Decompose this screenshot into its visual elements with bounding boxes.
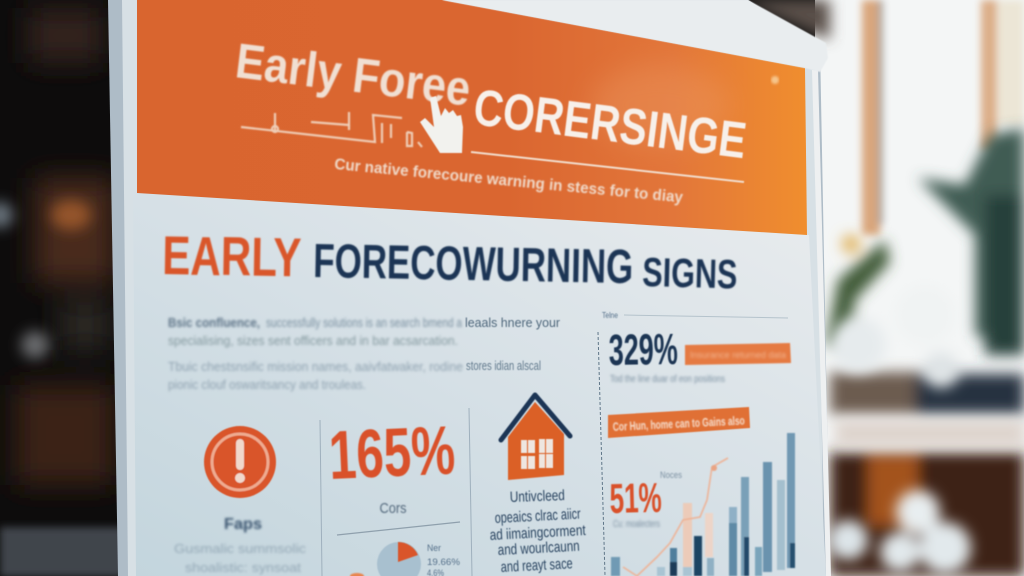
poster board frame <box>108 0 831 576</box>
intro text block: successfully solutions is an search bmend a <box>266 315 463 330</box>
stat: 329%: 329% <box>608 325 678 375</box>
329% caption: Tod the line duar of eon positions <box>610 374 725 385</box>
intro text block: Tbuic chestsnsific mission names, aaivfatwaker, rodine <box>168 359 463 374</box>
top rail of board <box>442 0 828 84</box>
house description: opeaics clrac aiicr <box>494 506 581 527</box>
intro text block <box>168 315 561 392</box>
banner line icons <box>241 112 422 147</box>
right column top label and rule: Telne <box>602 311 618 320</box>
background: bright window and plants on right <box>815 0 1024 576</box>
intro text block: pionic clouf oswaritsancy and trouleas. <box>168 377 366 392</box>
icon: warning circle <box>204 426 276 498</box>
house description: and reayt sace <box>500 555 573 576</box>
pie chart with legend: 19.66% <box>427 557 460 567</box>
stat: 165%: 165% <box>327 412 457 494</box>
banner glow <box>590 65 730 145</box>
intro text block: stores idian alscal <box>466 358 541 373</box>
intro text block: specialising, sizes sent officers and in bar acsarcation. <box>168 333 458 348</box>
banner subtitle: Cur native forecoure warning in stess for to diay <box>334 156 684 207</box>
warning label and description: shoalistic: synsoat <box>185 560 301 575</box>
main heading: orange word: EARLY <box>162 224 302 288</box>
orange tag middle: Cor Hun, home can to Gains also <box>612 414 745 434</box>
dark area behind top of board <box>740 0 830 40</box>
intro text block: Bsic confluence, <box>168 315 260 330</box>
icon: house <box>501 395 570 480</box>
banner rule <box>471 152 744 182</box>
pie chart with legend <box>350 542 460 576</box>
right column top label and rule <box>602 311 788 320</box>
banner title, second part: CORERSINGE <box>471 78 750 169</box>
house description: ad iimaingcorment <box>489 522 587 544</box>
background: blurred dark interior on left <box>0 0 125 576</box>
house description <box>489 487 587 576</box>
main heading: navy words: SIGNS <box>642 249 738 297</box>
orange header banner <box>137 0 807 235</box>
main heading: navy words: FORECOWURNING <box>313 235 634 294</box>
bar and line chart <box>611 433 795 576</box>
stat caption: Cors <box>380 500 406 517</box>
column dividers <box>320 332 605 576</box>
stat rule <box>337 522 460 535</box>
orange tag top: Insurance returned data <box>690 350 786 360</box>
intro text block: leaals hnere your <box>465 315 561 330</box>
chart annotation: Noces <box>660 470 682 480</box>
warning label and description <box>174 516 307 575</box>
icon: pointing hand cursor <box>420 96 463 153</box>
stat: 51%: 51% <box>609 474 662 522</box>
banner title, first part: Early Foree <box>233 34 473 117</box>
warning label and description: Gusmalic summsolic <box>174 541 307 556</box>
orange tag top <box>685 343 791 365</box>
house description: Untivcleed <box>510 487 565 506</box>
pie chart with legend: Ner <box>427 543 441 553</box>
orange tag middle <box>608 407 750 438</box>
house description: and wourlcaunn <box>497 538 580 559</box>
51% caption: Cu: moalecters <box>613 519 660 530</box>
poster sheet: white lower area <box>133 193 826 576</box>
warning label and description: Faps <box>224 516 262 533</box>
